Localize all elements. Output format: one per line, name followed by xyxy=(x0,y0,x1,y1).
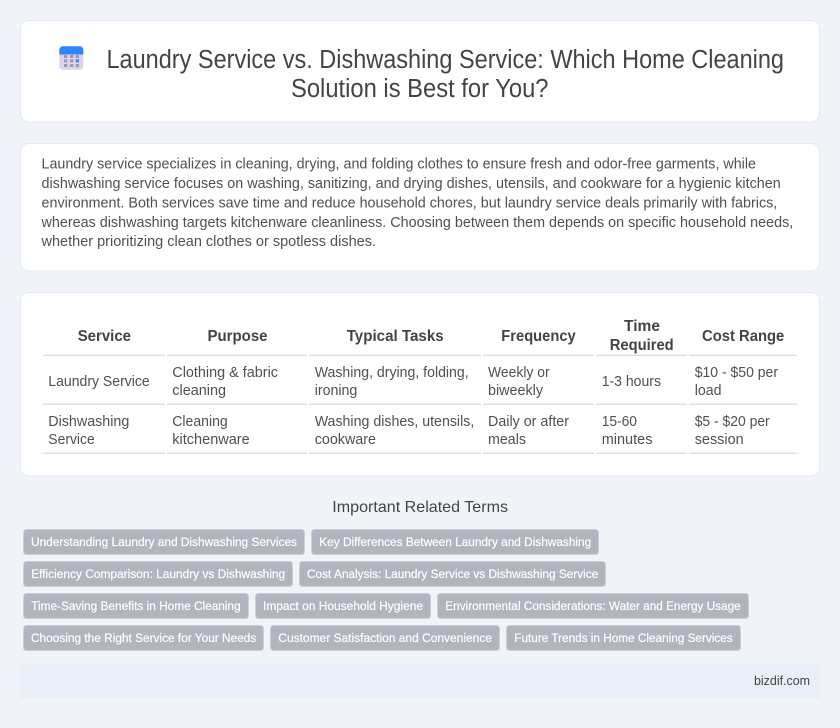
title xyxy=(106,46,784,103)
table row: dishwashing service: $5 - $20 per xyxy=(695,414,770,430)
related terms tags: Customer Satisfaction and Convenience xyxy=(278,631,492,645)
table row: laundry service: ironing xyxy=(315,383,357,399)
table header: Service xyxy=(78,328,131,345)
table row: dishwashing service: Cleaning xyxy=(172,414,228,430)
table header xyxy=(78,318,784,354)
intro text block: Laundry service specializes in cleaning, drying, and folding clothes to ensure fresh and odor-free garments, while xyxy=(42,156,756,172)
table row: laundry service: cleaning xyxy=(172,383,226,399)
table row: laundry service: $10 - $50 per xyxy=(695,365,778,381)
table row: dishwashing service: session xyxy=(695,432,744,448)
intro text block: whereas dishwashing targets kitchenware cleanliness. Choosing between them depends on specific household needs, xyxy=(41,215,793,231)
table row: dishwashing service xyxy=(48,414,770,448)
table row: dishwashing service: minutes xyxy=(602,432,652,448)
table row: laundry service: biweekly xyxy=(488,383,544,399)
related terms tags: Impact on Household Hygiene xyxy=(263,599,423,613)
table row: dishwashing service: 15-60 xyxy=(602,414,637,430)
table row: dishwashing service: Washing dishes, utensils, xyxy=(315,414,474,430)
table row: laundry service: Washing, drying, folding, xyxy=(315,365,469,381)
table header: Frequency xyxy=(501,328,576,345)
table header: Typical Tasks xyxy=(347,328,444,345)
table row: dishwashing service: cookware xyxy=(315,432,376,448)
table header: Purpose xyxy=(208,328,268,345)
related terms tags: Future Trends in Home Cleaning Services xyxy=(514,631,733,645)
table row: dishwashing service: Dishwashing xyxy=(48,414,129,430)
table header: Cost Range xyxy=(702,328,784,345)
intro text block: dishwashing service focuses on washing, sanitizing, and drying dishes, utensils, and cookware for a hygienic kitchen xyxy=(42,176,781,192)
title: Laundry Service vs. Dishwashing Service: Which Home Cleaning xyxy=(106,46,784,74)
table row: dishwashing service: meals xyxy=(488,432,526,448)
table row: laundry service xyxy=(48,365,778,399)
related terms tags: Understanding Laundry and Dishwashing Services xyxy=(31,535,297,549)
table row: dishwashing service: Daily or after xyxy=(488,414,569,430)
title: Solution is Best for You? xyxy=(291,75,548,103)
footer bar xyxy=(20,664,820,698)
related terms tags: Environmental Considerations: Water and Energy Usage xyxy=(445,599,741,613)
table row: laundry service: Clothing & fabric xyxy=(172,365,278,381)
related terms tags: Time-Saving Benefits in Home Cleaning xyxy=(31,599,241,613)
intro text block: whether prioritizing clean clothes or spotless dishes. xyxy=(40,234,376,250)
intro text block xyxy=(40,156,793,250)
icon: calendar xyxy=(59,46,83,70)
panel: comparison table xyxy=(20,292,820,476)
related terms tags: Key Differences Between Laundry and Dishwashing xyxy=(319,535,591,549)
table header: Required xyxy=(610,337,674,354)
intro text block: environment. Both services save time and reduce household chores, but laundry service deals primarily with fabrics, xyxy=(42,195,777,211)
table row: laundry service: load xyxy=(695,383,722,399)
table row: laundry service: 1-3 hours xyxy=(602,374,661,390)
related terms tags: Cost Analysis: Laundry Service vs Dishwashing Service xyxy=(307,567,598,581)
related terms heading: Important Related Terms xyxy=(332,499,508,516)
table row: laundry service: Laundry Service xyxy=(48,374,150,390)
table row: laundry service: Weekly or xyxy=(488,365,550,381)
table row: dishwashing service: kitchenware xyxy=(172,432,250,448)
header panel xyxy=(20,20,820,122)
related terms tags: Efficiency Comparison: Laundry vs Dishwashing xyxy=(31,567,285,581)
panel: introduction xyxy=(20,144,820,271)
related terms tags: Choosing the Right Service for Your Needs xyxy=(31,631,256,645)
table header: Time xyxy=(624,318,660,335)
footer bar: bizdif.com xyxy=(754,673,810,688)
table row: dishwashing service: Service xyxy=(48,432,95,448)
related terms tags xyxy=(24,530,748,650)
